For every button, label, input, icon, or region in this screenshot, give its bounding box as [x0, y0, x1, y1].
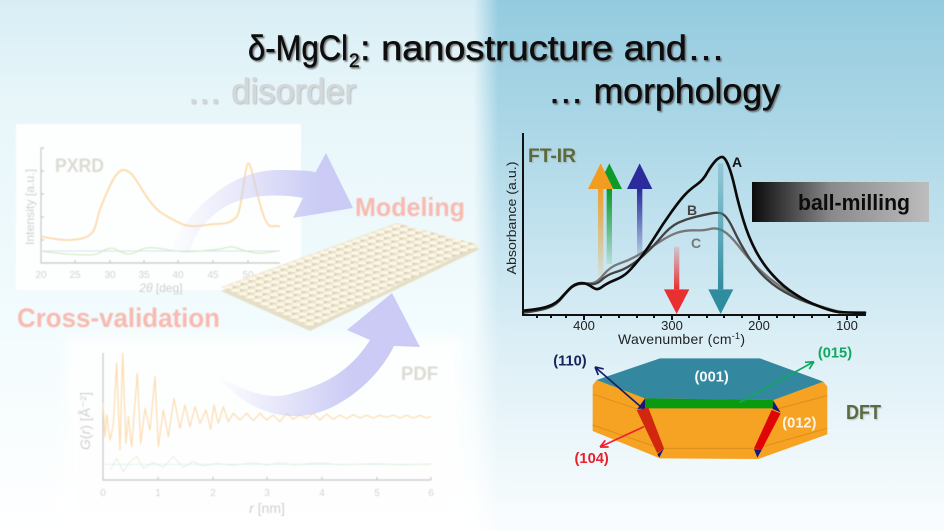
x-axis title: ) [740, 331, 745, 347]
title: : nanostructure and… [360, 29, 725, 68]
curve labels [687, 154, 742, 251]
spectrum curves [523, 157, 865, 313]
arrow: (110) [595, 367, 643, 409]
heading: disorder: … disorder [187, 72, 356, 111]
curve labels: A [732, 154, 742, 170]
ball-milling gradient bar [752, 182, 929, 222]
PXRD residual [41, 247, 280, 255]
panel: PDF chart [77, 353, 438, 516]
arrow: red down [664, 247, 689, 314]
panel: PXRD chart [23, 148, 280, 295]
background right [476, 0, 944, 500]
PDF tick labels: 5 [374, 488, 380, 499]
arrow: PDF to modeling [216, 293, 420, 416]
panel: PXRD chart background [16, 124, 301, 290]
x-axis title: Wavenumber (cm [618, 331, 732, 347]
facet labels: (110) [553, 354, 587, 370]
PDF tick labels: 4 [319, 488, 325, 499]
heading: morphology: … morphology [548, 72, 781, 111]
PDF label: PDF [401, 364, 438, 385]
PXRD tick labels: 45 [207, 270, 219, 281]
curve labels: B [687, 202, 697, 218]
facet labels: (015) [818, 345, 852, 361]
orange crystal body [593, 380, 827, 459]
title: 2 [349, 51, 360, 72]
arrow: teal down [708, 163, 733, 314]
facet labels: (001) [695, 370, 729, 386]
curve labels: C [691, 235, 701, 251]
tick labels: 100 [836, 318, 858, 333]
PXRD tick labels [35, 270, 254, 281]
arrow: orange, green and blue up [588, 163, 652, 276]
axes [41, 148, 280, 263]
arrow: (104) [600, 427, 644, 447]
label: Modeling: Modeling [355, 192, 465, 222]
PDF tick labels: 6 [428, 488, 434, 499]
tick labels: 300 [661, 318, 683, 333]
PDF tick labels: 2 [210, 488, 216, 499]
PDF curve [103, 353, 431, 450]
PXRD tick labels: 30 [104, 270, 116, 281]
tick labels: 200 [748, 318, 770, 333]
PDF residual [103, 457, 431, 472]
y-axis title: Absorbance (a.u.) [504, 162, 519, 274]
panel: PDF chart background [66, 337, 461, 525]
chart: FT-IR spectrum [504, 133, 866, 347]
PDF tick labels [100, 488, 434, 499]
PDF y-axis title: G(r) [Å⁻²] [77, 392, 93, 450]
PXRD y-axis title: Intensity [a.u.] [23, 169, 37, 245]
navy corners [637, 398, 781, 458]
facet labels: (012) [782, 416, 817, 432]
crystal morphology diagram [553, 345, 852, 467]
FT-IR label: FT-IR [528, 146, 576, 167]
title [248, 29, 725, 72]
title: δ-MgCl [248, 29, 348, 68]
top face [597, 358, 823, 400]
ball-milling gradient bar: ball-milling [798, 190, 910, 215]
facet labels [553, 345, 852, 467]
tick labels [573, 318, 858, 333]
PXRD curve [41, 163, 280, 240]
arrow: (015) [739, 362, 814, 403]
PDF tick labels: 1 [155, 488, 161, 499]
PDF tick labels: 3 [264, 488, 270, 499]
PXRD label: PXRD [55, 156, 104, 177]
modeling: layered mesh [221, 223, 480, 331]
label: Cross-validation: Cross-validation [17, 303, 220, 333]
tick labels: 400 [573, 318, 595, 333]
PXRD tick labels: 20 [35, 270, 47, 281]
green facet [645, 398, 773, 408]
arrow: PXRD to modeling [170, 153, 353, 250]
axes [103, 353, 431, 480]
PXRD tick labels: 40 [172, 270, 184, 281]
PDF tick labels: 0 [100, 488, 106, 499]
PDF x-axis title: r [nm] [249, 500, 285, 516]
PXRD tick labels: 25 [69, 270, 81, 281]
PXRD x-axis title: 2θ [deg] [138, 281, 183, 295]
red facets [637, 408, 781, 453]
PXRD tick labels: 35 [138, 270, 150, 281]
DFT label: DFT [846, 402, 881, 424]
axes [523, 133, 866, 320]
x-axis title: -1 [732, 331, 740, 341]
PXRD tick labels: 50 [242, 270, 254, 281]
facet labels: (104) [575, 451, 609, 467]
